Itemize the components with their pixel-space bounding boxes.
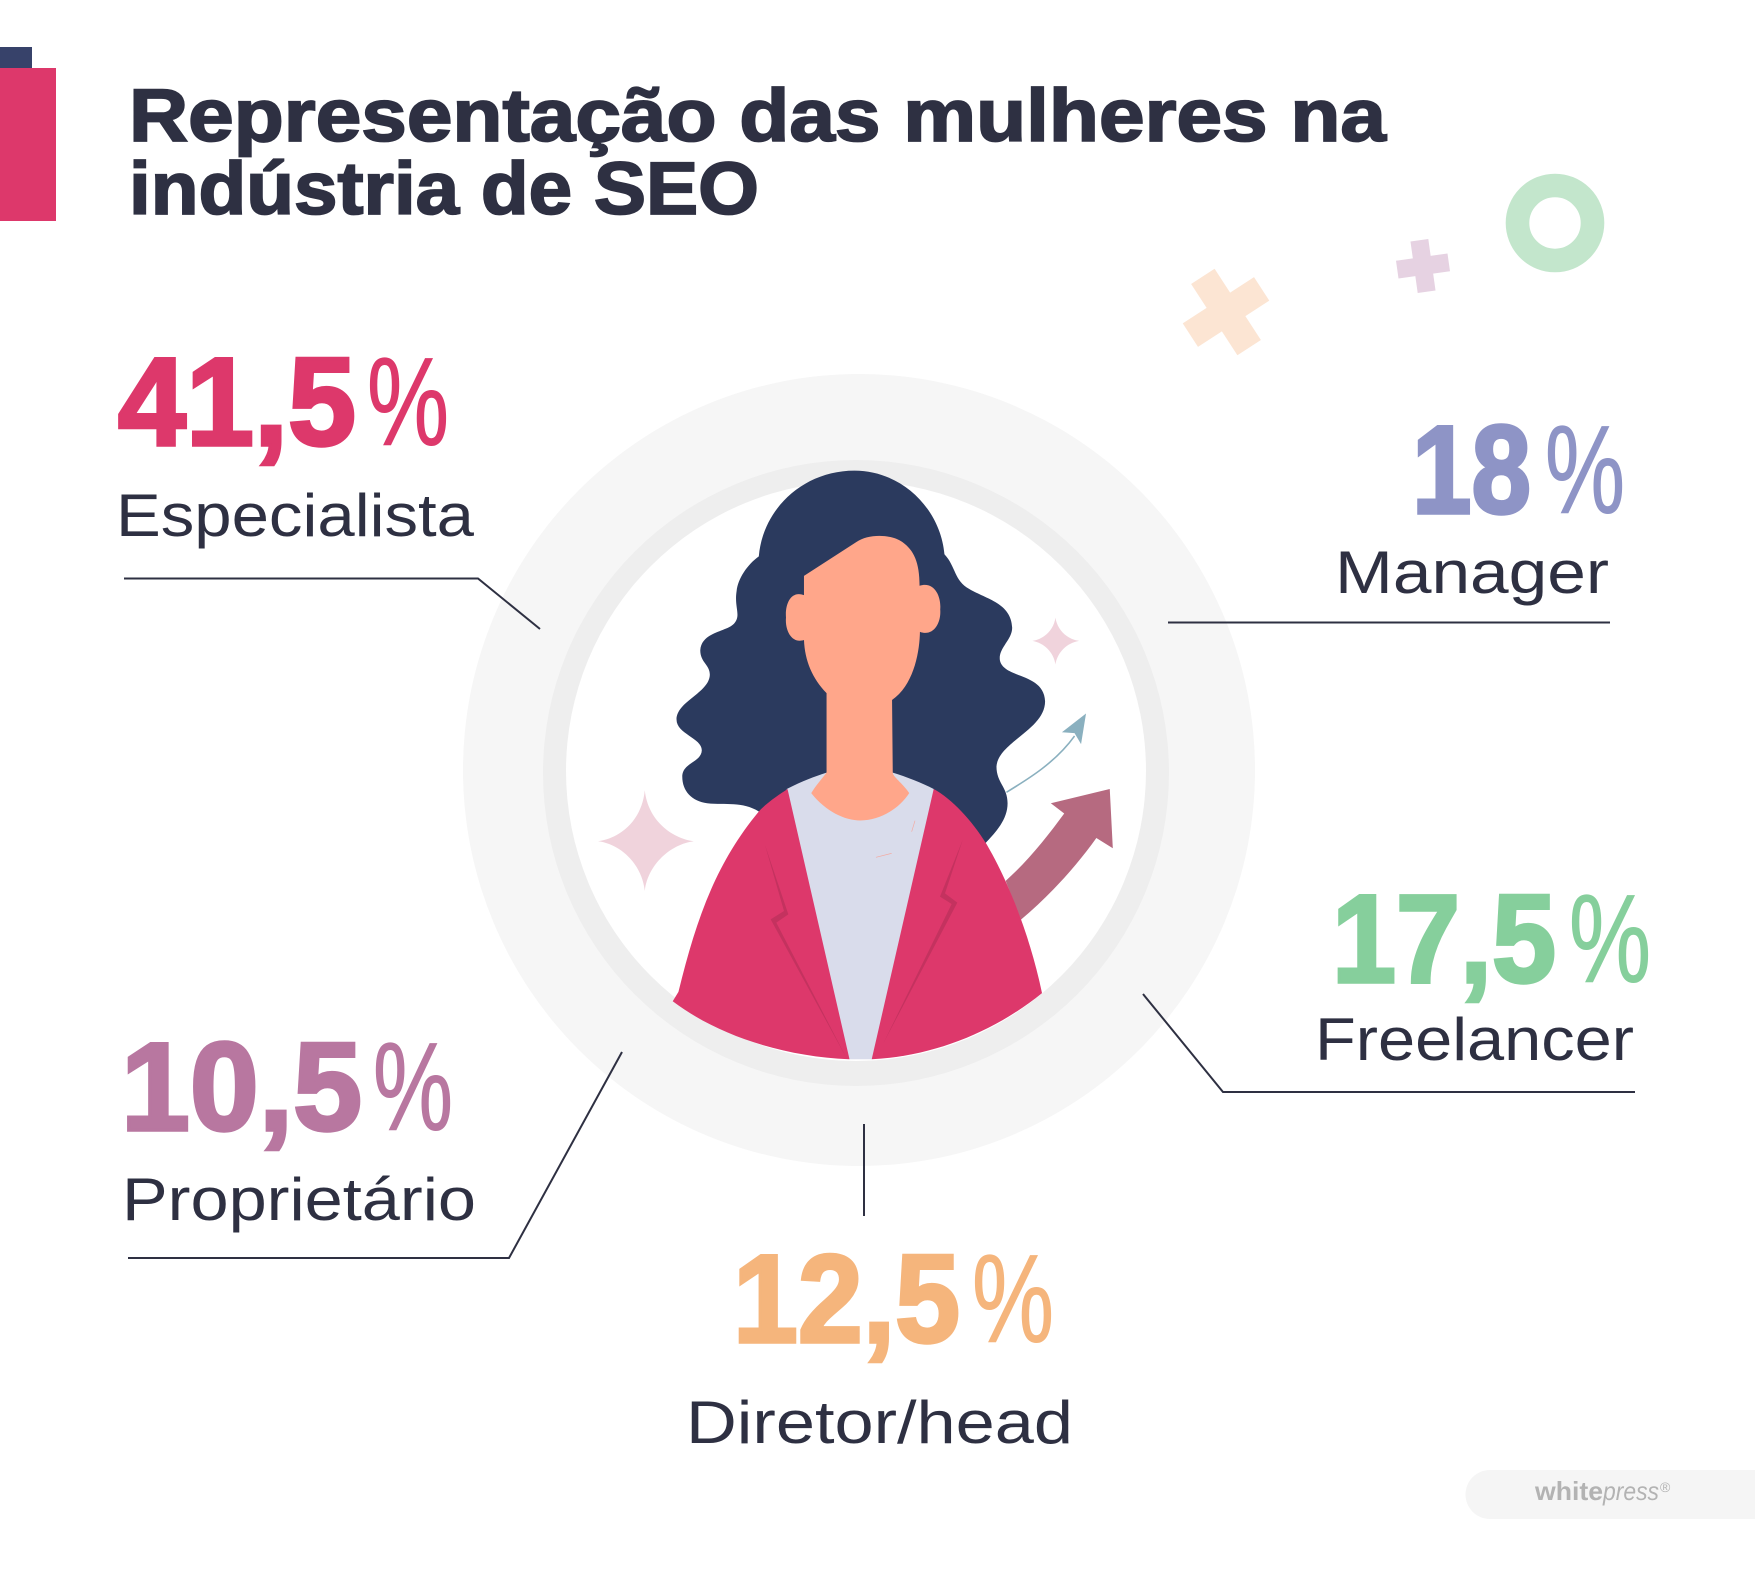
stat: 12,5% Diretor/head: 12,5: [733, 1230, 960, 1369]
title: Representação das mulheres na: [129, 74, 1387, 157]
stat: 18% Manager: %: [1545, 401, 1625, 540]
arrow: thin teal: [1006, 713, 1086, 792]
stat: 12,5% Diretor/head: [686, 1230, 1073, 1456]
decorative shapes: [1167, 186, 1592, 371]
shirt: [784, 773, 937, 1059]
stat: 41,5% Especialista: %: [367, 333, 449, 472]
stat: 41,5% Especialista: 41,5: [118, 333, 356, 472]
icon: large sparkle: [598, 790, 694, 891]
stat: 10,5% Proprietário: Proprietário: [122, 1166, 476, 1233]
head: [786, 536, 940, 700]
stat: 18% Manager: [1335, 401, 1625, 606]
jacket lapels and shirt creases: [765, 821, 963, 1058]
arrow: thick mauve: [1006, 789, 1113, 920]
stat: 17,5% Freelancer: Freelancer: [1315, 1006, 1634, 1073]
brand watermark: ®: [1660, 1479, 1671, 1495]
stat: 17,5% Freelancer: %: [1569, 870, 1651, 1009]
stat: 17,5% Freelancer: 17,5: [1332, 870, 1556, 1009]
brand watermark: [1466, 1470, 1755, 1519]
title: [129, 74, 1387, 230]
stat: 10,5% Proprietário: %: [373, 1018, 453, 1157]
concentric circle backdrop: [463, 374, 1255, 1166]
leader line: Manager: [1168, 622, 1610, 624]
title: indústria de SEO: [129, 147, 759, 230]
stat: 12,5% Diretor/head: Diretor/head: [686, 1389, 1073, 1456]
illustration: woman with growth arrows: [598, 471, 1113, 1059]
stat: 12,5% Diretor/head: %: [972, 1230, 1054, 1369]
header accent block: [0, 47, 56, 221]
stat: 18% Manager: 18: [1412, 401, 1531, 540]
leader line: Diretor/head: [863, 1124, 865, 1216]
leader line: Proprietário: [128, 1052, 622, 1258]
stat: 10,5% Proprietário: [121, 1018, 476, 1233]
neck: [811, 689, 909, 820]
stat: 41,5% Especialista: Especialista: [116, 482, 475, 549]
icon: small sparkle: [1032, 618, 1079, 665]
stat: 18% Manager: Manager: [1335, 539, 1609, 606]
stat: 10,5% Proprietário: 10,5: [121, 1018, 362, 1157]
hair: [677, 471, 1045, 844]
leader line: Freelancer: [1143, 994, 1635, 1092]
stat: 41,5% Especialista: [116, 333, 475, 549]
brand watermark: press: [1602, 1476, 1659, 1506]
brand watermark: white: [1534, 1476, 1603, 1506]
stat: 17,5% Freelancer: [1315, 870, 1651, 1073]
leader line: Especialista: [124, 578, 540, 629]
jacket: [673, 789, 1042, 1059]
